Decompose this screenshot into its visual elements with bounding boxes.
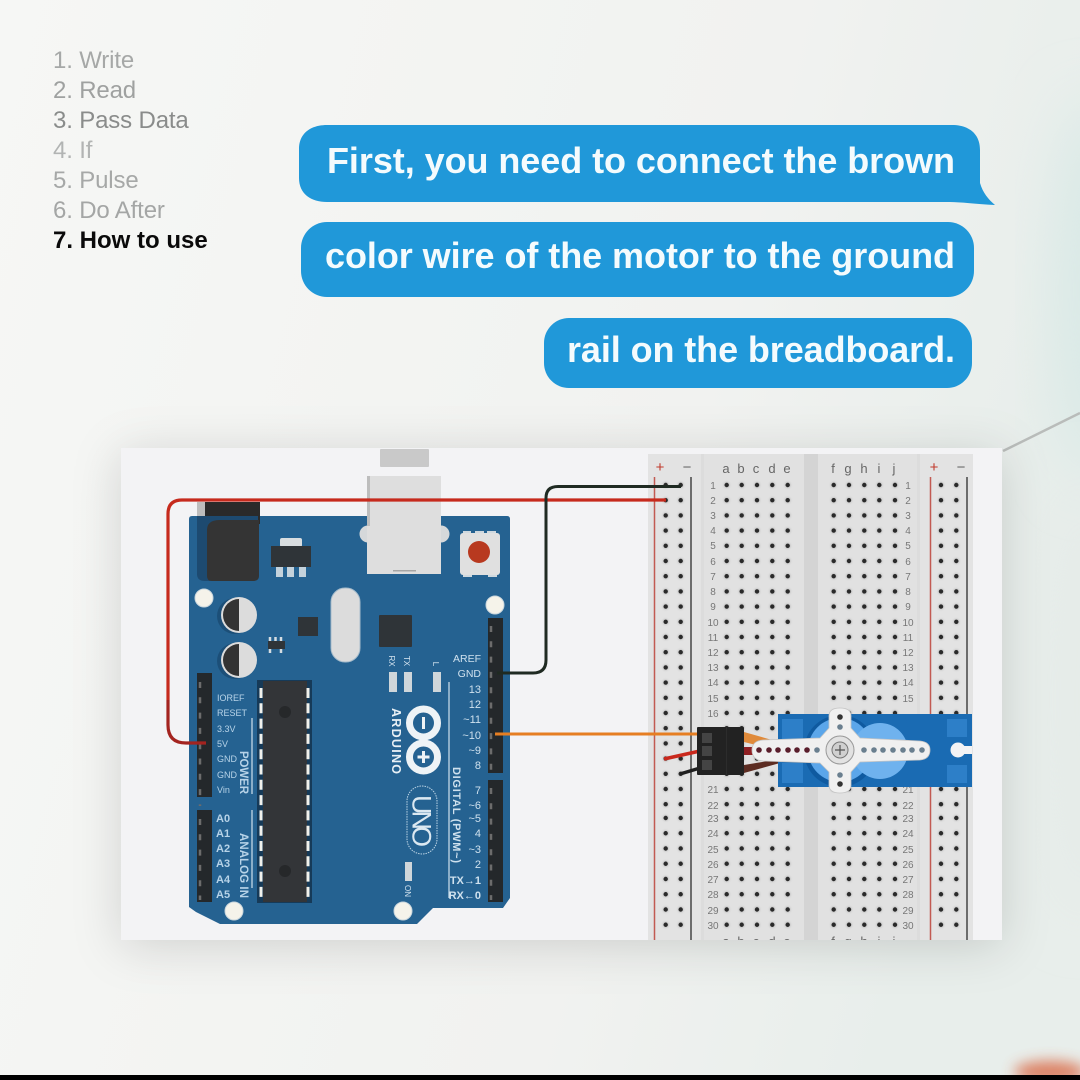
left pin labels: A0 [216, 813, 230, 825]
row numbers: 5 [905, 541, 911, 552]
right pin labels: ~6 [468, 800, 481, 812]
topic list: 2. Read [53, 77, 136, 104]
left pin labels: ANALOG IN [237, 833, 249, 898]
row numbers: 25 [902, 845, 914, 856]
column letters: d [768, 461, 776, 476]
arduino uno board: RX [387, 655, 396, 667]
arduino logo: ARDUINO [389, 708, 403, 774]
left pin labels: A2 [216, 843, 230, 855]
row numbers: 24 [902, 829, 914, 840]
row numbers: 7 [710, 572, 716, 583]
speech bubble line 1 [299, 125, 995, 205]
column letters: c [753, 461, 760, 476]
row numbers: 28 [707, 890, 719, 901]
decorative thin line at right edge [1003, 413, 1080, 451]
arduino uno board [189, 476, 510, 924]
rail signs: + [656, 459, 665, 476]
row numbers: 30 [707, 921, 719, 932]
row numbers: 22 [707, 801, 719, 812]
rail lines [654, 477, 930, 940]
row numbers: 23 [902, 814, 914, 825]
row numbers: 7 [905, 572, 911, 583]
left pin labels: IOREF [217, 693, 245, 703]
right pin labels: ~9 [468, 745, 481, 757]
left pin labels: GND [217, 770, 238, 780]
right pin labels: ~5 [468, 813, 481, 825]
row numbers: 2 [710, 496, 716, 507]
column letters: j [892, 461, 896, 476]
row numbers: 26 [902, 860, 914, 871]
bottom black strip [0, 1075, 1080, 1080]
crystal [331, 588, 360, 662]
row numbers: 5 [710, 541, 716, 552]
row numbers: 12 [707, 648, 719, 659]
row numbers: 13 [902, 663, 914, 674]
row numbers: 13 [707, 663, 719, 674]
right pin labels: 7 [475, 785, 481, 797]
ATmega chip [257, 680, 312, 903]
arduino uno board: ON [403, 885, 412, 897]
row numbers: 27 [707, 875, 719, 886]
speech bubble line 1: First, you need to connect the brown [327, 140, 955, 181]
topic list: 3. Pass Data [53, 107, 189, 134]
row numbers: 2 [905, 496, 911, 507]
right pin labels: 2 [475, 859, 481, 871]
right pin labels: ~3 [468, 844, 481, 856]
row numbers: 29 [707, 906, 719, 917]
left pin labels [216, 693, 249, 901]
column letters: b [737, 461, 745, 476]
column letters [722, 461, 896, 949]
topic list: 6. Do After [53, 197, 165, 224]
column letters: j [892, 934, 896, 949]
small chips [268, 615, 412, 653]
reset button [460, 531, 500, 577]
right pin labels: ~11 [463, 714, 481, 726]
left pin labels: POWER [237, 751, 249, 795]
circuit diagram panel [121, 448, 1002, 949]
column letters: a [722, 461, 730, 476]
row numbers [707, 481, 914, 932]
topic list: 5. Pulse [53, 167, 139, 194]
row numbers: 14 [707, 678, 719, 689]
right pin labels: TX→1 [450, 875, 481, 887]
right pin labels: 12 [469, 699, 481, 711]
row numbers: 10 [902, 618, 914, 629]
mounting holes [195, 589, 504, 920]
black ground wire [497, 486, 681, 673]
column letters: f [831, 934, 835, 949]
column letters: e [783, 934, 791, 949]
row numbers: 11 [903, 633, 914, 644]
status LEDs [389, 672, 441, 881]
row numbers: 6 [710, 557, 716, 568]
row numbers: 9 [710, 602, 716, 613]
left pin labels: RESET [217, 708, 248, 718]
row numbers: 15 [902, 694, 914, 705]
right pin labels [449, 653, 481, 902]
power jack [197, 502, 260, 581]
breadboard holes [666, 485, 956, 930]
row numbers: 26 [707, 860, 719, 871]
orange signal wire [495, 732, 700, 736]
micro servo motor [752, 708, 972, 793]
column letters: i [878, 461, 881, 476]
rail signs: − [683, 459, 692, 476]
row numbers: 16 [707, 709, 719, 720]
row numbers: 8 [905, 587, 911, 598]
row numbers: 30 [902, 921, 914, 932]
right pin labels: 8 [475, 760, 481, 772]
arduino logo [389, 708, 438, 774]
speech bubble line 3: rail on the breadboard. [567, 329, 955, 370]
right pin labels: RX←0 [449, 890, 481, 902]
left pin labels: A5 [216, 889, 230, 901]
arduino uno board: L [431, 662, 440, 667]
row numbers: 3 [710, 511, 716, 522]
UNO mark: UNO [406, 795, 436, 847]
row numbers: 1 [905, 481, 911, 492]
topic list: 4. If [53, 137, 93, 164]
row numbers: 3 [905, 511, 911, 522]
row numbers: 1 [710, 481, 716, 492]
rail signs: − [957, 459, 966, 476]
column letters: g [844, 461, 852, 476]
servo horn [752, 708, 930, 793]
breadboard [648, 454, 973, 949]
row numbers: 6 [905, 557, 911, 568]
row numbers: 9 [905, 602, 911, 613]
USB connector [360, 476, 450, 574]
row numbers: 11 [708, 633, 719, 644]
row numbers: 23 [707, 814, 719, 825]
pin headers [197, 618, 503, 902]
column letters: a [722, 934, 730, 949]
USB stub [380, 449, 429, 467]
rail signs: + [930, 459, 939, 476]
row numbers: 27 [902, 875, 914, 886]
right pin labels: 13 [469, 684, 481, 696]
row numbers: 10 [707, 618, 719, 629]
rail signs [656, 463, 965, 470]
left pin labels: 5V [217, 739, 228, 749]
row numbers: 12 [902, 648, 914, 659]
right pin labels: 4 [475, 828, 481, 840]
right pin labels: AREF [453, 653, 481, 665]
row numbers: 8 [710, 587, 716, 598]
speech bubble line 3 [544, 318, 972, 388]
arduino uno board: TX [402, 656, 411, 667]
topic list: 1. Write [53, 47, 134, 74]
column letters: e [783, 461, 791, 476]
left pin labels: A4 [216, 874, 231, 886]
left pin labels: A1 [216, 828, 230, 840]
speech bubble line 2: color wire of the motor to the ground [325, 235, 955, 276]
row numbers: 4 [710, 526, 716, 537]
column letters: d [768, 934, 776, 949]
topic list [53, 47, 208, 254]
row numbers: 22 [902, 801, 914, 812]
left pin labels: A3 [216, 858, 230, 870]
arduino uno board: DIGITAL (PWM~) [450, 767, 462, 863]
row numbers: 29 [902, 906, 914, 917]
row numbers: 21 [902, 785, 914, 796]
speech bubble line 2 [301, 222, 974, 297]
column letters: c [753, 934, 760, 949]
left pin labels: 3.3V [217, 724, 236, 734]
capacitors [217, 597, 257, 679]
right pin labels: GND [458, 668, 481, 680]
row numbers: 14 [902, 678, 914, 689]
servo leads [664, 732, 780, 774]
left pin labels: GND [217, 754, 238, 764]
row numbers: 4 [905, 526, 911, 537]
red power wire [168, 500, 666, 743]
row numbers: 15 [707, 694, 719, 705]
column letters: h [860, 461, 868, 476]
column letters: f [831, 461, 835, 476]
right pin labels: ~10 [462, 730, 481, 742]
row numbers: 24 [707, 829, 719, 840]
column letters: h [860, 934, 868, 949]
voltage regulator [271, 538, 311, 577]
row numbers: 21 [707, 785, 719, 796]
topic list: 7. How to use [53, 227, 208, 254]
column letters: g [844, 934, 852, 949]
row numbers: 25 [707, 845, 719, 856]
column letters: i [878, 934, 881, 949]
row numbers: 28 [902, 890, 914, 901]
column letters: b [737, 934, 745, 949]
servo connector [697, 727, 744, 775]
left pin labels: Vin [217, 785, 230, 795]
